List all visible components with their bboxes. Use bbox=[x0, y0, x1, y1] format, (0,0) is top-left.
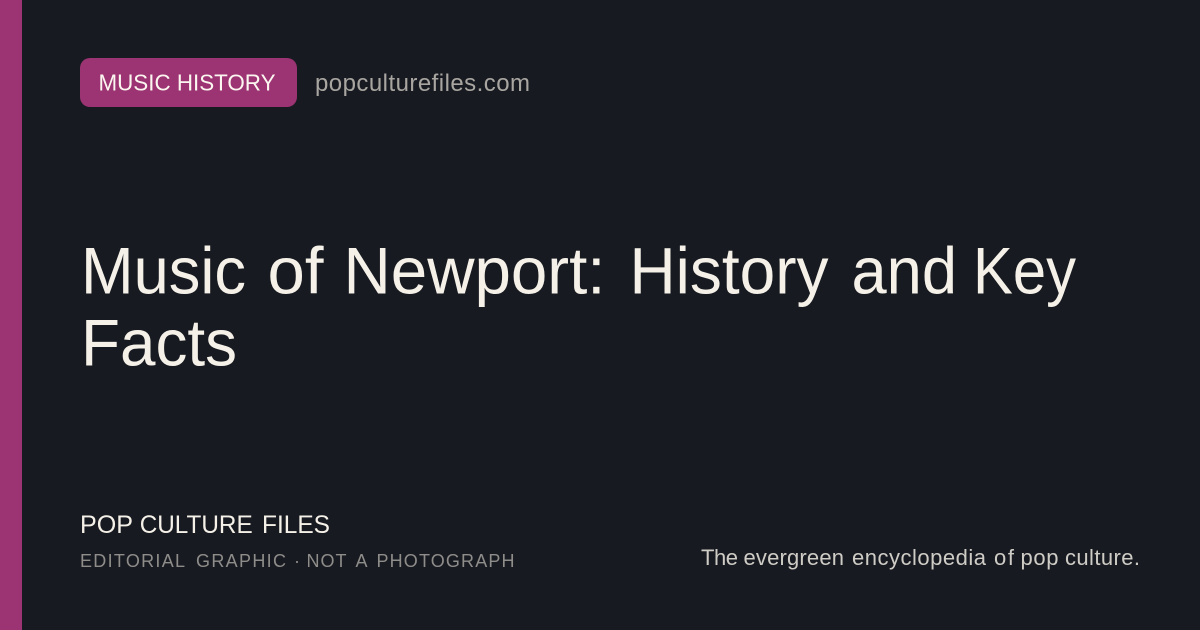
disclaimer: A bbox=[356, 551, 368, 571]
accent bar bbox=[0, 0, 22, 630]
tagline: evergreen bbox=[744, 545, 844, 570]
brand name: POP bbox=[80, 511, 133, 539]
disclaimer: PHOTOGRAPH bbox=[376, 551, 514, 571]
title: Newport: bbox=[344, 234, 606, 308]
brand name: FILES bbox=[262, 511, 330, 539]
title: Music bbox=[81, 234, 246, 308]
disclaimer: NOT bbox=[306, 551, 346, 571]
title: Facts bbox=[81, 306, 237, 380]
brand name: CULTURE bbox=[140, 511, 253, 539]
tagline: pop bbox=[1020, 545, 1058, 570]
title bbox=[81, 234, 1076, 380]
category badge bbox=[80, 58, 297, 107]
category badge: MUSIC HISTORY bbox=[98, 70, 276, 96]
disclaimer: · bbox=[294, 551, 300, 571]
tagline: culture. bbox=[1065, 545, 1140, 570]
site domain: popculturefiles.com bbox=[315, 70, 530, 97]
title: of bbox=[268, 234, 324, 308]
tagline: The bbox=[701, 545, 738, 570]
disclaimer: GRAPHIC bbox=[196, 551, 286, 571]
disclaimer bbox=[80, 551, 514, 571]
title: and bbox=[852, 234, 957, 308]
title: Key bbox=[973, 234, 1076, 308]
tagline: encyclopedia bbox=[852, 545, 987, 570]
tagline bbox=[701, 545, 1140, 570]
title: History bbox=[630, 234, 828, 308]
tagline: of bbox=[994, 545, 1015, 570]
disclaimer: EDITORIAL bbox=[80, 551, 185, 571]
brand name bbox=[80, 511, 330, 539]
